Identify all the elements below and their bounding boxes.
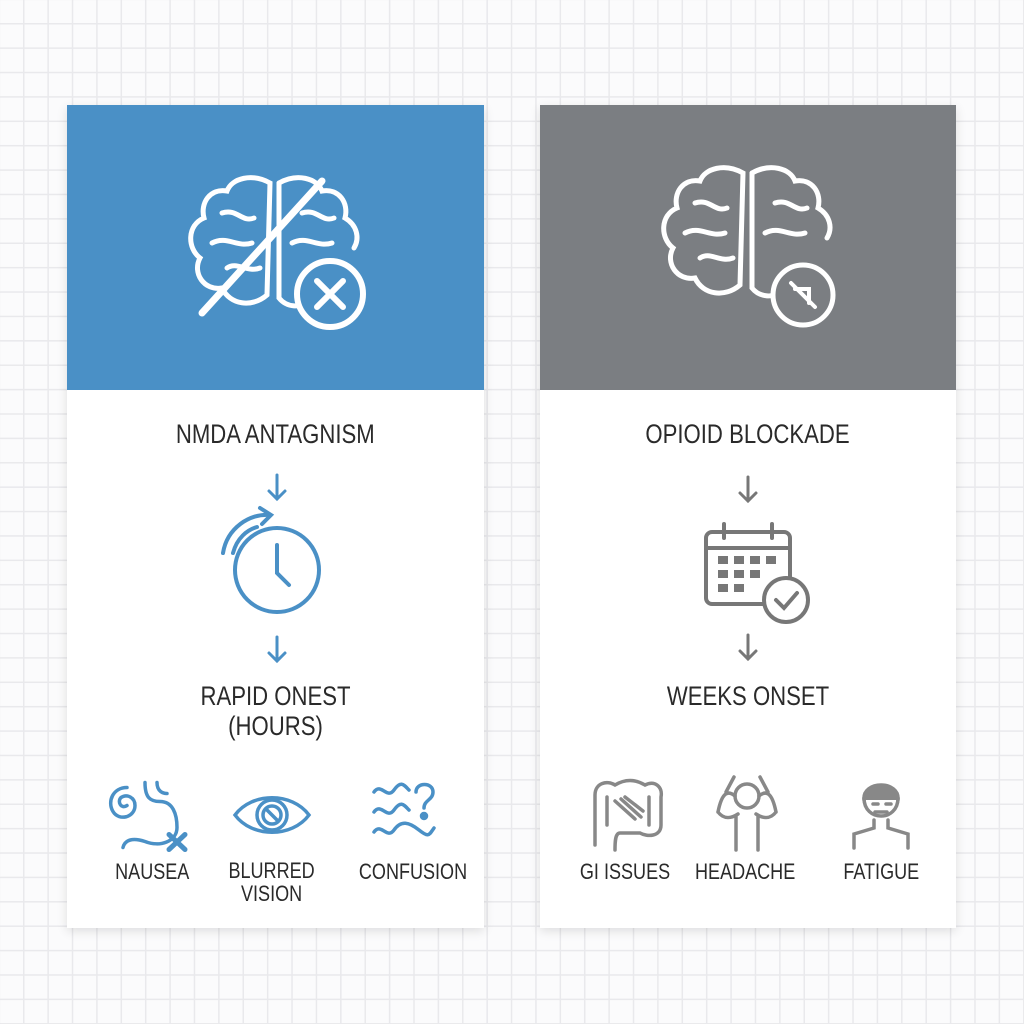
panel: NMDA antagonism xyxy=(67,105,484,928)
symptom: nausea: NAUSEA xyxy=(115,859,189,884)
header: blue with brain icon xyxy=(67,105,484,390)
heading: OPIOID BLOCKADE xyxy=(646,419,850,449)
symptom: blurred vision: VISION xyxy=(241,881,303,906)
text: rapid onset: RAPID ONEST xyxy=(200,681,351,711)
arrow xyxy=(267,474,287,501)
symptom: blurred vision xyxy=(229,796,315,906)
heading: NMDA ANTAGNISM xyxy=(176,419,375,449)
arrow xyxy=(267,636,287,663)
symptom: headache: HEADACHE xyxy=(695,859,795,884)
header: gray with brain icon xyxy=(540,105,956,390)
symptom: fatigue: FATIGUE xyxy=(843,859,919,884)
text: weeks onset: WEEKS ONSET xyxy=(667,681,829,711)
icon: calendar with check xyxy=(704,522,810,624)
icon: brain with slash and x xyxy=(188,175,366,330)
text: rapid onset xyxy=(200,681,351,741)
text: rapid onset: (HOURS) xyxy=(228,711,323,741)
symptom: confusion xyxy=(359,782,467,884)
icon: brain with blocked badge xyxy=(661,165,836,328)
symptom: GI issues: GI ISSUES xyxy=(580,859,670,884)
arrow xyxy=(738,476,758,503)
arrow xyxy=(738,634,758,661)
symptom: confusion: CONFUSION xyxy=(359,859,467,884)
symptom: headache xyxy=(695,775,795,884)
symptom: nausea xyxy=(108,780,190,884)
symptom: GI issues xyxy=(580,778,670,884)
symptom: blurred vision: BLURRED xyxy=(229,858,315,883)
symptom: fatigue xyxy=(843,783,919,884)
panel: opioid blockade xyxy=(540,105,956,928)
icon: clock xyxy=(221,506,321,614)
